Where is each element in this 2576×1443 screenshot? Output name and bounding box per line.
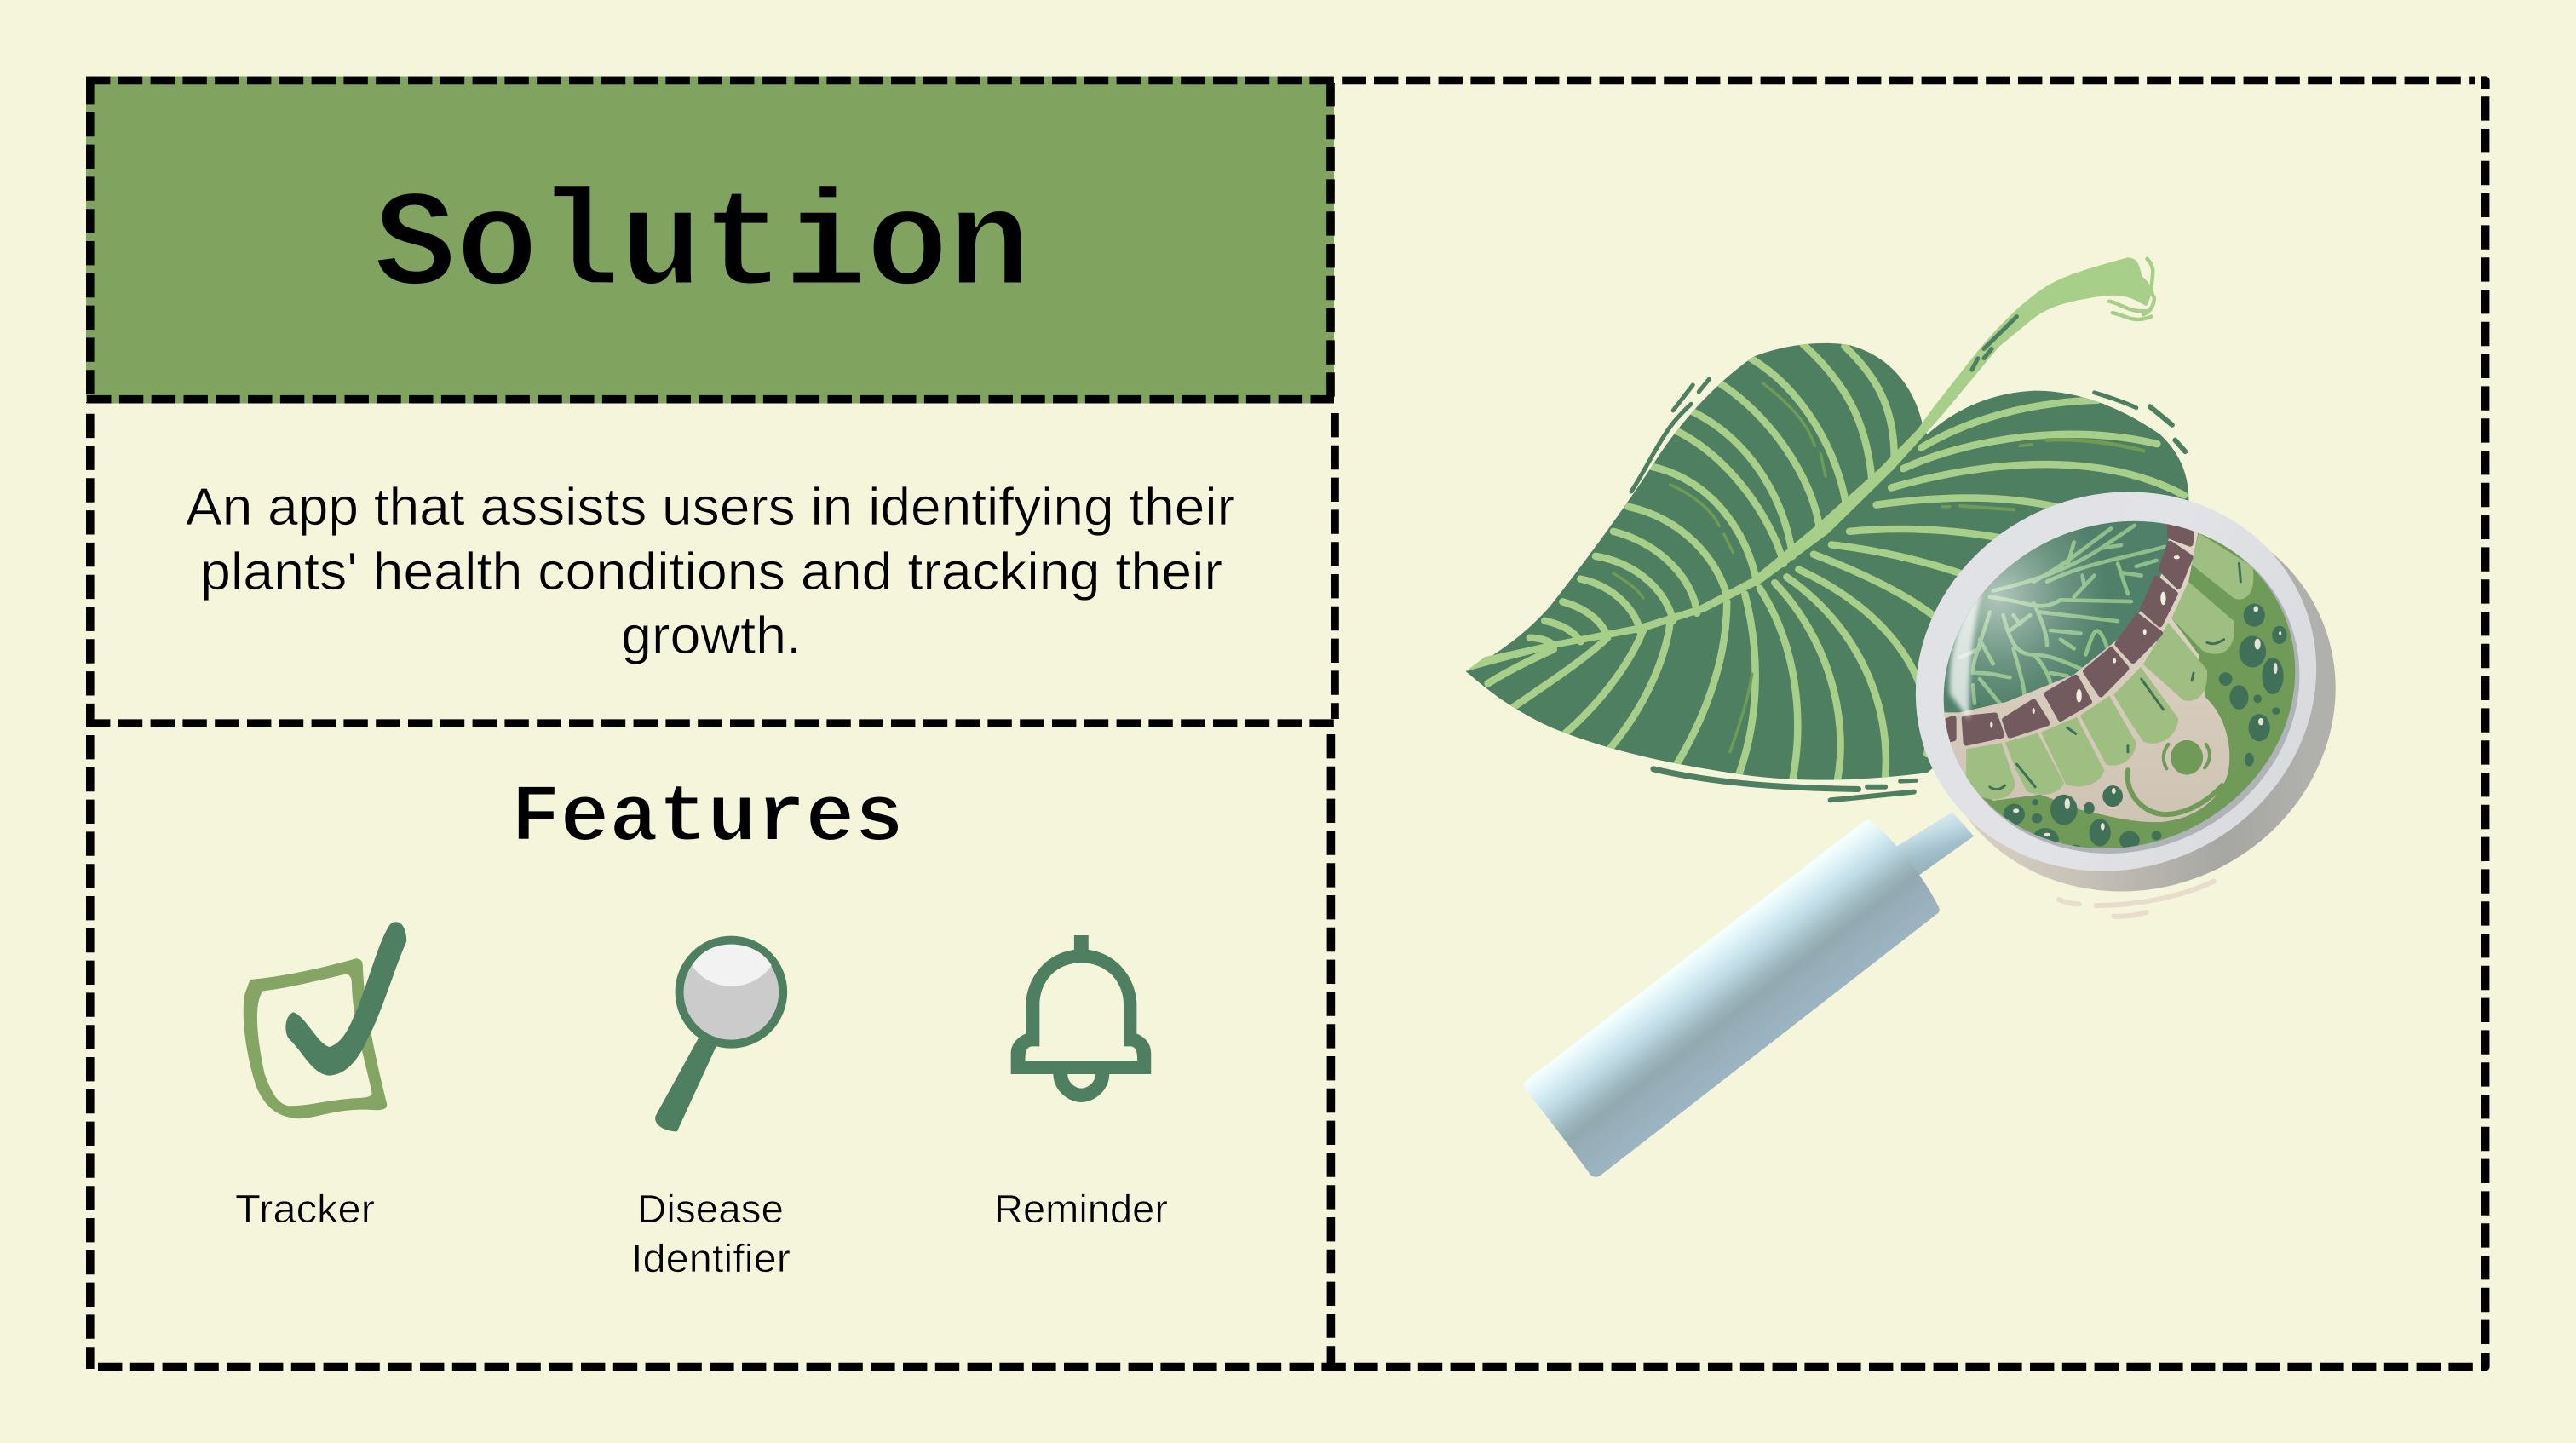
description text: plants' health conditions and tracking their <box>200 543 1222 601</box>
epidermal band cells <box>1946 524 2192 743</box>
dark cell marks <box>1990 563 2240 790</box>
icon: tracker checkbox <box>244 922 406 1118</box>
plant tissue background <box>1944 521 2295 848</box>
icon: disease identifier magnifier <box>655 936 787 1131</box>
description text: An app that assists users in identifying their <box>186 478 1235 537</box>
leaf veins <box>1488 344 2184 780</box>
palisade cells <box>1966 533 2253 799</box>
lens ring <box>1853 427 2379 936</box>
nucleus <box>2171 740 2203 775</box>
handle neck <box>1895 812 1974 877</box>
lens contents <box>1944 521 2295 848</box>
icon: reminder bell <box>1011 935 1151 1102</box>
illustration: leaf <box>1466 257 2189 800</box>
label: disease identifier: Disease <box>637 1187 784 1231</box>
beige cell tissue <box>1944 525 2230 823</box>
ground marks under lens <box>2059 882 2214 917</box>
features heading: Features <box>511 772 904 865</box>
surface veins <box>1959 526 2165 704</box>
label: disease identifier: Identifier <box>631 1236 791 1280</box>
ring inner edge <box>1891 466 2355 911</box>
cell highlights <box>1990 555 2180 728</box>
label: reminder: Reminder <box>994 1187 1168 1231</box>
glass glare <box>1946 532 2095 693</box>
chloroplast highlights <box>2013 606 2281 836</box>
glass reflection streak <box>1950 584 1983 720</box>
lens back rim <box>1869 443 2399 957</box>
chloroplasts <box>2004 604 2287 853</box>
panel: title banner <box>86 77 1334 404</box>
leaf surface <box>1944 521 2172 716</box>
handle <box>1524 819 1940 1177</box>
label: disease identifier <box>631 1187 791 1280</box>
description text: growth. <box>621 607 802 665</box>
leaf blade <box>1466 343 2189 780</box>
leaf highlights <box>1613 383 2143 752</box>
panel: description <box>86 413 1336 727</box>
dark sketch marks <box>1631 317 2185 800</box>
label: tracker: Tracker <box>235 1187 375 1231</box>
stem and midrib <box>1466 257 2151 671</box>
stem tip marks <box>2109 259 2154 319</box>
illustration: magnifying glass <box>1524 492 2336 1177</box>
panel: features <box>90 734 2473 1371</box>
title: Solution <box>374 170 1031 325</box>
nucleus and cell wall marks <box>2128 744 2222 814</box>
description text <box>186 478 1235 665</box>
